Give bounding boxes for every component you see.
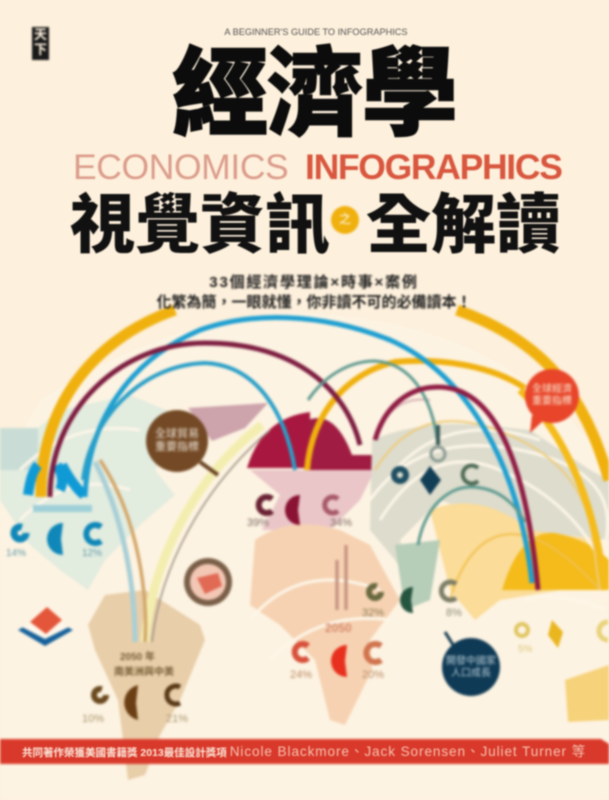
North America data group: 12% xyxy=(82,548,102,559)
maroon right arc xyxy=(375,387,538,590)
small English heading: A BEGINNER'S GUIDE TO INFOGRAPHICS xyxy=(224,27,408,37)
South America data group: 2050 年 xyxy=(120,650,155,663)
North America data group xyxy=(6,505,102,559)
callout: red bubble xyxy=(525,369,579,433)
major flow arcs xyxy=(28,310,609,590)
callout: navy bubble: 人口成長 xyxy=(451,667,491,679)
callout: navy bubble: 開發中國家 xyxy=(446,654,496,667)
title: 經濟學 xyxy=(172,41,457,148)
callout: brown bubble: 重要指標 xyxy=(155,439,199,453)
right Asia data group xyxy=(516,620,608,655)
Europe data group xyxy=(247,495,352,529)
Africa data group: 8% xyxy=(446,607,462,619)
callout: navy bubble xyxy=(442,632,500,696)
South America data group: 21% xyxy=(166,713,188,725)
thin pastel arcs xyxy=(95,390,605,642)
publisher logo: 天下 xyxy=(34,27,47,57)
right Asia data group: 5% xyxy=(518,644,533,655)
English title xyxy=(73,147,562,187)
icon: round brown seal xyxy=(184,558,232,606)
Africa data group: 2050 xyxy=(325,621,352,635)
English title: ECONOMICS xyxy=(73,147,288,187)
Africa data group: 32% xyxy=(362,607,384,619)
Europe data group: 34% xyxy=(330,517,352,529)
small blue arc xyxy=(83,363,295,480)
Europe data group: 39% xyxy=(247,517,269,529)
banner text: 共同著作榮獲美國書籍獎 2013最佳設計獎項 Nicole Blackmore、Jack Sorensen、Juliet Turner 等 xyxy=(22,744,586,759)
Africa data group: 24% xyxy=(290,669,312,681)
continents xyxy=(0,395,609,780)
Africa data group: 20% xyxy=(362,669,384,681)
South America data group: 10% xyxy=(82,713,104,725)
blue foot arcs xyxy=(28,465,84,495)
subtitle: 視覺資訊 xyxy=(70,188,330,261)
teal arc xyxy=(308,361,438,445)
callout: red bubble: 重要指標 xyxy=(532,394,572,407)
English title: INFOGRAPHICS xyxy=(305,147,562,187)
callout: brown bubble: 全球貿易 xyxy=(155,426,199,440)
tagline: 33個經濟學理論×時事×案例 xyxy=(209,274,419,291)
South America data group: 南美洲與中美 xyxy=(114,665,174,678)
maroon left arc xyxy=(50,343,360,497)
gold inner arc xyxy=(307,361,525,470)
publisher logo xyxy=(32,27,49,60)
map texture stripes xyxy=(20,428,608,660)
tagline: 化繁為簡，一眼就懂，你非讀不可的必備讀本！ xyxy=(156,294,472,311)
gold outer arc xyxy=(41,310,609,497)
icon: red stacked blocks xyxy=(18,607,73,646)
pale inner map background xyxy=(0,313,609,800)
Africa data group xyxy=(290,582,462,681)
callout: brown bubble xyxy=(146,410,218,475)
tagline xyxy=(156,272,472,311)
big blue arc xyxy=(85,318,532,583)
North America data group: 14% xyxy=(6,548,26,559)
icon: yellow marker: 之 xyxy=(339,212,351,226)
icon: yellow marker xyxy=(331,206,359,234)
red banner xyxy=(0,739,609,764)
South America data group xyxy=(82,650,188,725)
subtitle right: 全解讀 xyxy=(366,188,561,261)
callout: red bubble: 全球經濟 xyxy=(532,382,572,395)
Asia data group xyxy=(394,425,478,495)
lower teal arc xyxy=(418,487,525,545)
